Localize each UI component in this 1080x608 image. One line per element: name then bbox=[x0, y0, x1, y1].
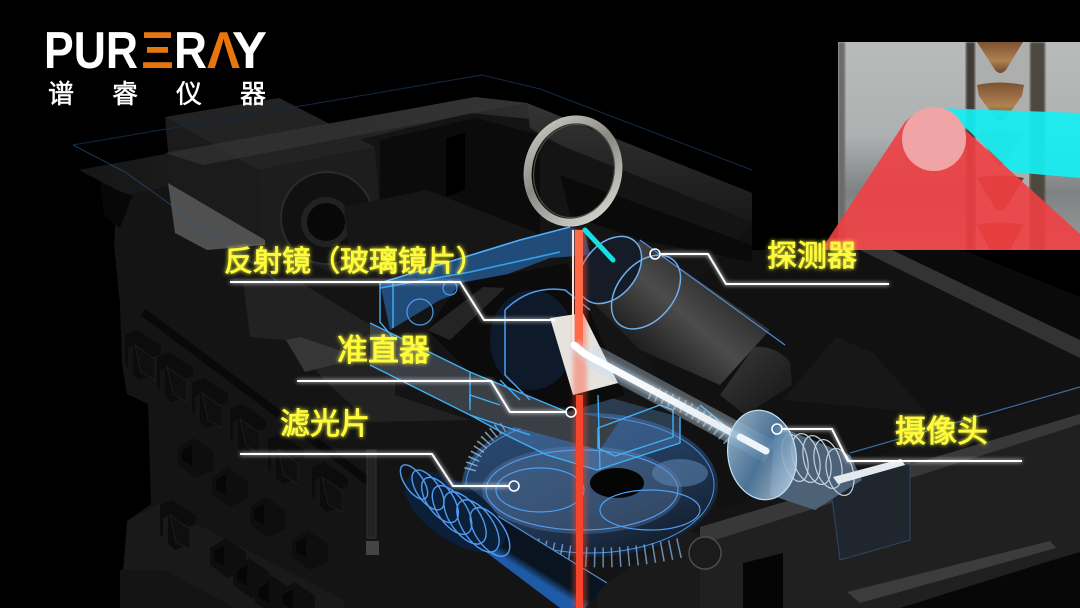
band highlight bbox=[380, 227, 570, 283]
connector row 1 bbox=[125, 330, 348, 512]
camera beam end bbox=[740, 437, 766, 451]
gear hub bbox=[652, 459, 708, 487]
leader line reflector bbox=[230, 282, 555, 320]
logo chinese name: 仪 bbox=[176, 79, 202, 109]
inset surface bbox=[838, 42, 1080, 250]
chassis: left notch bbox=[100, 176, 140, 228]
inset channel bbox=[976, 42, 1029, 250]
logo wordmark: R bbox=[174, 22, 207, 80]
gear disc bbox=[462, 413, 718, 557]
camera bracket bbox=[833, 459, 905, 484]
chassis: opening slot bbox=[446, 133, 465, 197]
gear disc outline bbox=[466, 417, 714, 553]
band lower highlight bbox=[380, 252, 560, 288]
motor: side face bbox=[165, 117, 262, 250]
cyan reflected beam bbox=[934, 108, 1080, 178]
detector cylinder bbox=[566, 224, 792, 415]
chassis: bottom slot bbox=[743, 553, 783, 608]
hub bbox=[490, 290, 574, 390]
detector second ring bbox=[598, 242, 694, 342]
label camera: 摄像头 bbox=[895, 414, 988, 449]
connector rail bbox=[143, 312, 368, 481]
chassis: diagonal plate bbox=[783, 337, 927, 413]
motor: front face bbox=[258, 147, 382, 280]
motor: shaft bbox=[304, 200, 348, 244]
ring sample bbox=[517, 110, 629, 232]
chassis: base inner bbox=[120, 570, 235, 608]
mirror plate bbox=[550, 313, 618, 395]
gear inner plate bbox=[482, 446, 682, 534]
motor: coupling block bbox=[344, 190, 537, 285]
leader line filter bbox=[240, 454, 509, 486]
top mask above inset bbox=[752, 0, 1080, 42]
wedge 5 bbox=[977, 222, 1024, 250]
red incident cone bbox=[821, 108, 1080, 250]
brown wedge 2 bbox=[977, 82, 1024, 121]
beam halo bbox=[590, 355, 770, 452]
motor: translucent strip lower bbox=[168, 183, 265, 250]
ring inner edge bbox=[524, 116, 624, 226]
worm shaft edge bbox=[493, 513, 607, 583]
standoff post bbox=[367, 450, 376, 538]
laser lower bbox=[576, 395, 583, 608]
stage box wire bbox=[598, 395, 728, 470]
chassis: rail end block bbox=[597, 530, 700, 608]
chassis: main left body bbox=[79, 97, 1080, 608]
upper gear teeth bbox=[650, 392, 730, 440]
connector rows bbox=[125, 282, 470, 608]
leader line collimator bbox=[297, 381, 566, 412]
logo chinese name bbox=[48, 79, 266, 109]
beam glow bbox=[574, 345, 768, 452]
wire circles bbox=[407, 281, 700, 530]
glass plate outline bbox=[73, 75, 752, 170]
logo chinese name: 谱 bbox=[48, 79, 74, 109]
label filter: 滤光片 bbox=[280, 408, 370, 441]
anchor filter bbox=[509, 481, 519, 491]
laser glow bbox=[573, 230, 587, 608]
gear hole bbox=[590, 468, 644, 498]
anchor camera bbox=[772, 424, 782, 434]
callout: filter bbox=[240, 408, 519, 491]
label collimator: 准直器 bbox=[337, 333, 430, 368]
gear inner ring bbox=[486, 450, 678, 530]
translucent block bbox=[243, 282, 470, 422]
gray plate bbox=[370, 323, 620, 450]
label reflector: 反射镜（玻璃镜片） bbox=[224, 245, 485, 278]
logo chinese name: 睿 bbox=[112, 79, 138, 109]
detector front lens ring bbox=[566, 224, 654, 316]
motor: top face bbox=[165, 98, 375, 170]
anchor detector bbox=[650, 249, 660, 259]
lower gear teeth bbox=[490, 525, 680, 557]
anchor collimator bbox=[566, 407, 576, 417]
chassis: blue rail line bbox=[850, 387, 1080, 453]
chassis: rear opening bbox=[380, 118, 540, 235]
hub outline bbox=[505, 289, 590, 400]
logo bbox=[44, 22, 267, 109]
chassis: hex screw bbox=[689, 537, 721, 569]
chassis: inner stage bbox=[830, 463, 910, 560]
leader line detector bbox=[660, 254, 889, 284]
logo wordmark: Ξ bbox=[141, 22, 174, 80]
ring outer band bbox=[517, 110, 629, 232]
glass plate lower edge bbox=[73, 145, 290, 290]
inset dark rail right bbox=[1030, 42, 1045, 250]
callout: reflector bbox=[224, 245, 555, 320]
light spot bbox=[902, 107, 966, 171]
machine chassis bbox=[79, 97, 1080, 608]
logo wordmark: PUR bbox=[44, 22, 138, 80]
upper blue translucent band bbox=[380, 227, 590, 330]
blue optical assembly bbox=[370, 227, 730, 557]
laser upper bbox=[575, 230, 583, 348]
chassis: front rail bbox=[700, 414, 1080, 545]
motor: translucent plate strip bbox=[165, 97, 527, 165]
camera lens bbox=[721, 405, 905, 510]
wedge 4 bbox=[977, 176, 1024, 211]
chassis: lower black channel bbox=[900, 552, 1080, 608]
detector tube body bbox=[590, 240, 770, 385]
motor bbox=[165, 97, 537, 285]
inset left edge bbox=[838, 42, 845, 250]
connector row 3 bbox=[160, 500, 315, 608]
blue stage plate bbox=[443, 380, 680, 470]
left gear teeth bbox=[470, 425, 505, 470]
laser core bbox=[572, 230, 574, 348]
camera threaded barrel bbox=[770, 425, 862, 510]
chassis: front lower plate bbox=[597, 424, 1080, 608]
logo chinese name: 器 bbox=[240, 79, 266, 109]
red laser beam bbox=[572, 230, 587, 608]
chassis: top rail right bbox=[527, 103, 752, 222]
camera threads bbox=[777, 430, 859, 499]
connector row 2 bbox=[178, 438, 328, 570]
logo wordmark: Λ bbox=[207, 22, 240, 80]
plate wire bbox=[370, 323, 567, 435]
stage plate outline bbox=[443, 400, 680, 470]
left housing wire bbox=[380, 283, 500, 405]
logo wordmark bbox=[44, 22, 267, 80]
chassis: base block bbox=[120, 504, 344, 608]
black mask behind inset bbox=[752, 0, 840, 250]
worm threads bbox=[395, 460, 518, 563]
inset dark rail left bbox=[966, 42, 975, 250]
small metal clamp bbox=[286, 337, 345, 372]
chassis: outer lit band bbox=[860, 250, 1080, 358]
wedge 3 bbox=[977, 130, 1024, 165]
worm body bbox=[391, 456, 519, 568]
diagonal dark strip bbox=[427, 287, 505, 340]
dark housing bbox=[427, 263, 625, 412]
worm shaft bbox=[470, 513, 607, 608]
white camera beam bbox=[574, 345, 770, 452]
chassis: lower rail highlight bbox=[847, 541, 1056, 603]
standoff screw bbox=[366, 541, 379, 555]
callout: detector bbox=[650, 240, 889, 284]
cyan detector beam bbox=[585, 230, 613, 260]
detector blue edge bbox=[640, 240, 785, 345]
worm screw bbox=[391, 456, 607, 608]
beam core bbox=[574, 345, 766, 451]
brown wedge 1 bbox=[977, 42, 1023, 73]
callout: camera bbox=[772, 414, 1022, 461]
chassis: lower dark strip of right rail bbox=[560, 175, 752, 262]
callout: collimator bbox=[297, 333, 576, 417]
inset background bbox=[838, 42, 1080, 250]
leader line camera bbox=[782, 429, 1022, 461]
chassis: top rail left bbox=[79, 97, 540, 195]
logo wordmark: Y bbox=[232, 22, 267, 80]
label detector: 探测器 bbox=[767, 240, 857, 273]
camera front lens bbox=[721, 405, 803, 505]
detector rear section bbox=[720, 347, 792, 415]
motor: flange bbox=[281, 172, 373, 264]
chassis: right interior bbox=[640, 225, 1080, 510]
chassis: outer wedge bbox=[892, 250, 1080, 340]
inset: ring close-up bbox=[821, 42, 1080, 250]
